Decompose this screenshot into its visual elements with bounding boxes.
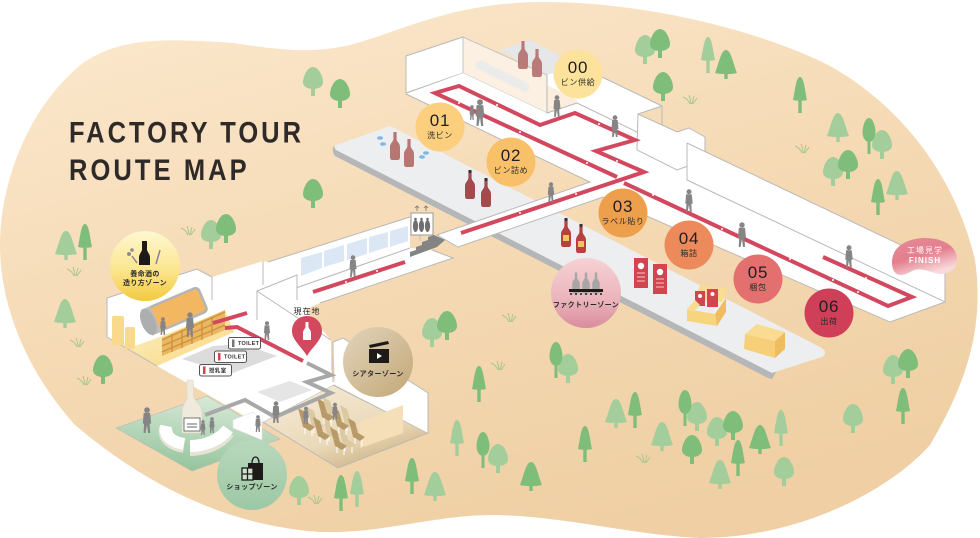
bottles	[377, 41, 586, 253]
theatre screen	[360, 405, 403, 448]
back room wall	[406, 37, 463, 93]
lower corridor with windows	[268, 206, 453, 312]
glass room with conveyor	[463, 37, 600, 113]
title: FACTORY TOUR	[69, 116, 301, 149]
partition wall	[257, 275, 331, 372]
toilet signs: TOILET	[238, 341, 260, 347]
main factory corridor floor and walls	[406, 37, 945, 322]
zone: theatre: シアターゾーン	[352, 369, 404, 378]
visitors	[143, 95, 853, 435]
zone: brewing: 養命酒の	[130, 269, 160, 278]
step 04	[664, 220, 714, 270]
step 03	[598, 188, 648, 238]
step 00: 00	[568, 58, 588, 77]
brewing room yellow floor	[112, 310, 234, 366]
seats	[298, 397, 365, 455]
step 02: 02	[501, 146, 521, 165]
open carton box	[687, 285, 728, 326]
current location pin: 現在地	[294, 306, 320, 316]
step 00	[554, 50, 602, 98]
step 01: 洗ビン	[427, 130, 453, 140]
step 04: 箱詰	[680, 248, 698, 258]
route: grey section	[205, 363, 331, 417]
step 00: ビン供給	[561, 77, 595, 87]
zone: brewing	[110, 231, 180, 301]
windows	[301, 226, 408, 276]
factory conveyor platform	[333, 126, 825, 379]
step 06	[804, 288, 854, 338]
route line	[313, 86, 912, 306]
step 02: ビン詰め	[494, 165, 528, 175]
step 04: 04	[679, 229, 699, 248]
title: ROUTE MAP	[69, 153, 247, 186]
finish badge: FINISH	[909, 256, 941, 265]
current location pin	[292, 306, 322, 356]
theatre floor	[263, 385, 428, 468]
finish badge: 工場見学	[907, 245, 943, 255]
zone: shop: ショップゾーン	[226, 483, 278, 491]
block A	[637, 114, 705, 170]
toilet signs: 授乳室	[209, 366, 227, 374]
barrel shelves	[162, 310, 225, 356]
step 06: 06	[819, 297, 839, 316]
hall white floor	[107, 261, 335, 422]
step 03: ラベル貼り	[602, 216, 644, 226]
step 05: 05	[748, 263, 768, 282]
theatre wall	[333, 338, 428, 433]
route: red section in hall	[213, 313, 303, 361]
stairs	[410, 235, 445, 257]
upper wall	[547, 65, 662, 132]
long wall	[687, 143, 945, 302]
finish badge	[892, 238, 957, 275]
display benches	[166, 412, 262, 449]
step 06: 出荷	[820, 316, 838, 326]
step 05: 梱包	[749, 282, 767, 292]
step 01	[416, 102, 464, 152]
zone: brewing: 造り方ゾーン	[123, 278, 167, 287]
display bottle	[182, 380, 202, 433]
trees and grass	[54, 29, 918, 511]
step 02	[486, 138, 536, 186]
title	[69, 116, 301, 186]
step 05	[734, 254, 782, 304]
toilet signs	[200, 338, 260, 376]
red cartons	[634, 258, 667, 294]
corridor floor	[406, 73, 945, 322]
toilet signs: TOILET	[224, 354, 246, 360]
gray floor patches	[182, 344, 277, 374]
left hall zones	[107, 261, 428, 471]
elevator sign	[411, 206, 433, 241]
zone: theatre	[343, 327, 413, 397]
step 01: 01	[430, 111, 450, 130]
zone: factory: ファクトリーゾーン	[553, 300, 619, 309]
zone: factory	[551, 258, 621, 328]
shop floor	[116, 396, 280, 471]
tank	[136, 286, 208, 338]
yellow blocks	[112, 316, 135, 349]
step 03: 03	[613, 197, 633, 216]
closed carton box	[744, 324, 785, 358]
zone: shop	[217, 440, 287, 510]
